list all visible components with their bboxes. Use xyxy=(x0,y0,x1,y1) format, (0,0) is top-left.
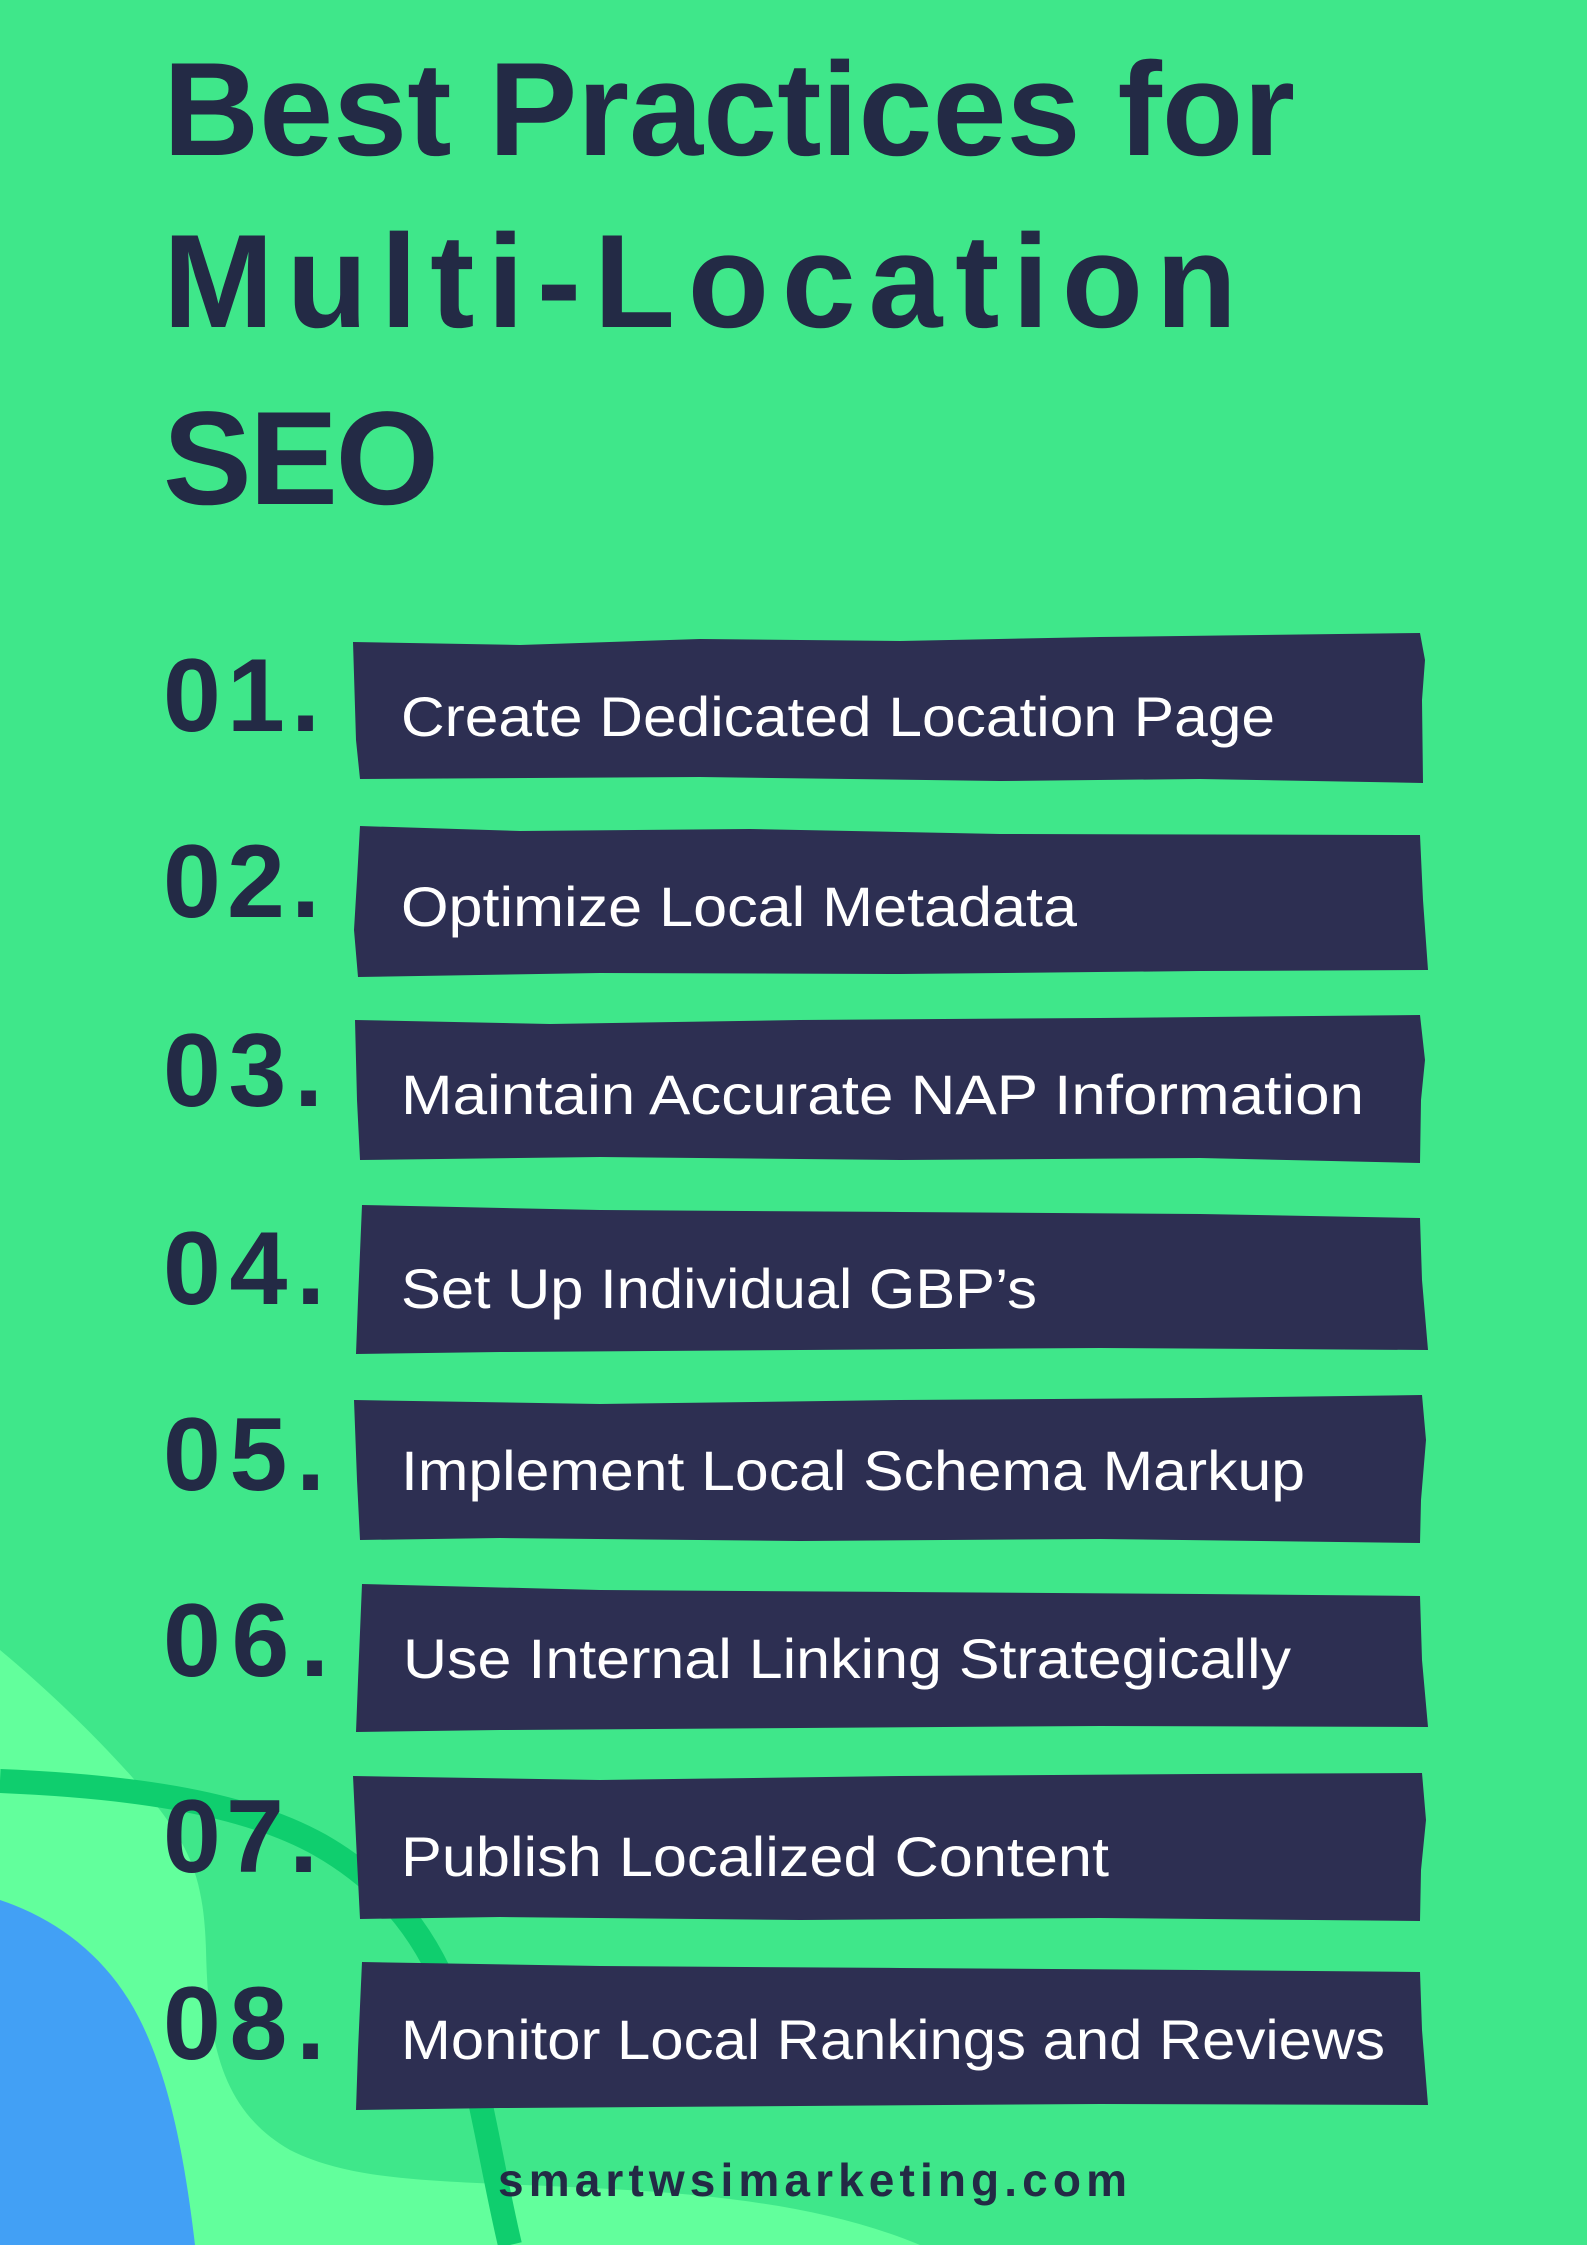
item 08 xyxy=(163,1962,1428,2110)
item 04: 04. xyxy=(163,1211,325,1327)
title xyxy=(163,36,1295,533)
item 04: Set Up Individual GBP’s xyxy=(401,1257,1037,1320)
item 04 xyxy=(163,1205,1428,1354)
item 08: 08. xyxy=(163,1966,325,2082)
item 08: Monitor Local Rankings and Reviews xyxy=(401,2008,1385,2071)
item 01 xyxy=(163,633,1425,783)
background shape: light green blob xyxy=(0,1650,920,2245)
item 05 xyxy=(163,1395,1426,1543)
item 05: Implement Local Schema Markup xyxy=(401,1439,1305,1502)
title: Multi-Location xyxy=(163,208,1237,356)
title: SEO xyxy=(163,385,439,533)
item 03: Maintain Accurate NAP Information xyxy=(401,1063,1364,1126)
title: Best Practices for xyxy=(163,36,1295,184)
item 03 xyxy=(163,1013,1425,1163)
footer: website: smartwsimarketing.com xyxy=(498,2154,1127,2206)
item 07: Publish Localized Content xyxy=(401,1825,1109,1888)
item 01: 01. xyxy=(163,638,320,754)
list: best practices xyxy=(163,633,1428,2110)
item 07 xyxy=(163,1773,1426,1921)
item 02: 02. xyxy=(163,824,320,940)
background shape: blue blob xyxy=(0,1900,195,2245)
background shape: green curve line xyxy=(0,1781,510,2245)
item 06 xyxy=(163,1583,1428,1732)
item 07: 07. xyxy=(163,1779,318,1895)
item 02 xyxy=(163,824,1428,977)
item 03: 03. xyxy=(163,1013,323,1129)
item 02: Optimize Local Metadata xyxy=(401,875,1078,938)
item 06: 06. xyxy=(163,1583,329,1699)
item 06: Use Internal Linking Strategically xyxy=(403,1627,1291,1690)
item 01: Create Dedicated Location Page xyxy=(401,685,1275,748)
item 05: 05. xyxy=(163,1397,325,1513)
